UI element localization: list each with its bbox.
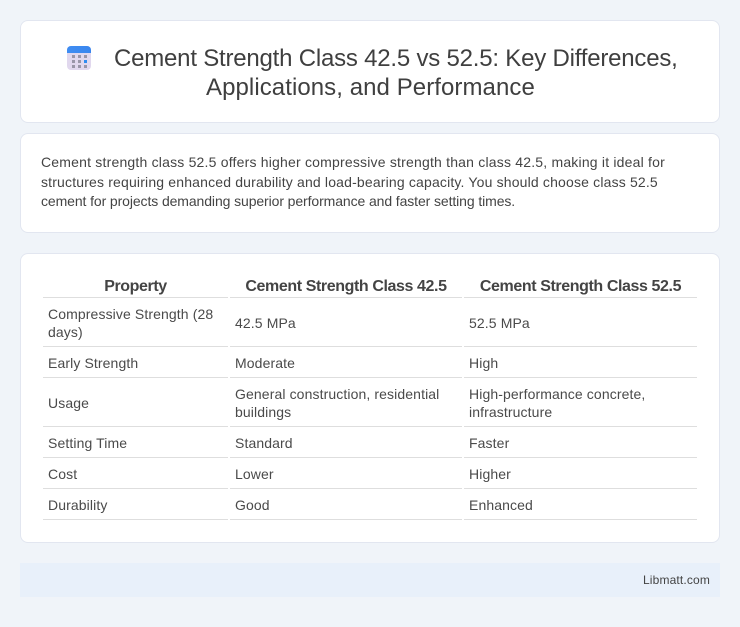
row: durability	[48, 497, 533, 513]
row: setting time: Standard	[235, 435, 293, 451]
row: early strength	[48, 355, 498, 371]
row: cost: Cost	[48, 466, 77, 482]
row: compressive strength: 42.5 MPa	[235, 315, 296, 331]
row: setting time: Setting Time	[48, 435, 127, 451]
intro text	[41, 154, 665, 209]
intro text: Cement strength class 52.5 offers higher compressive strength than class 42.5, making it ideal for	[41, 154, 665, 170]
row: usage	[48, 386, 645, 420]
footer brand: Libmatt.com	[643, 573, 710, 587]
title: Cement Strength Class 42.5 vs 52.5: Key Differences,	[114, 45, 678, 72]
row: cost	[48, 466, 511, 482]
table header	[104, 278, 682, 295]
row: durability: Good	[235, 497, 270, 513]
row: usage: Usage	[48, 395, 89, 411]
row: cost: Higher	[469, 466, 511, 482]
row: usage: buildings	[235, 404, 291, 420]
row: compressive strength	[48, 306, 530, 340]
row: usage: General construction, residential	[235, 386, 439, 402]
row: early strength: Moderate	[235, 355, 295, 371]
row: compressive strength: 52.5 MPa	[469, 315, 530, 331]
table header: Property	[104, 278, 167, 295]
title	[114, 45, 678, 101]
row: durability: Durability	[48, 497, 107, 513]
intro text: structures requiring enhanced durability and load-bearing capacity. You should choose class 52.5	[41, 174, 658, 190]
row: usage: High-performance concrete,	[469, 386, 645, 402]
intro text: cement for projects demanding superior performance and faster setting times.	[41, 193, 515, 209]
title: Applications, and Performance	[206, 74, 535, 101]
table header: Cement Strength Class 42.5	[245, 278, 447, 295]
row: early strength: High	[469, 355, 498, 371]
row: compressive strength: Compressive Strength (28	[48, 306, 213, 322]
row: early strength: Early Strength	[48, 355, 138, 371]
row: durability: Enhanced	[469, 497, 533, 513]
panel: title card	[20, 20, 720, 123]
row: setting time	[48, 435, 510, 451]
table header: Cement Strength Class 52.5	[480, 278, 681, 295]
panel: comparison table card	[20, 253, 720, 543]
panel: intro card	[20, 133, 720, 233]
row: cost: Lower	[235, 466, 274, 482]
row: usage: infrastructure	[469, 404, 552, 420]
row: compressive strength: days)	[48, 324, 83, 340]
row: setting time: Faster	[469, 435, 509, 451]
icon: calendar grid	[67, 46, 91, 70]
footer bar	[20, 563, 720, 597]
